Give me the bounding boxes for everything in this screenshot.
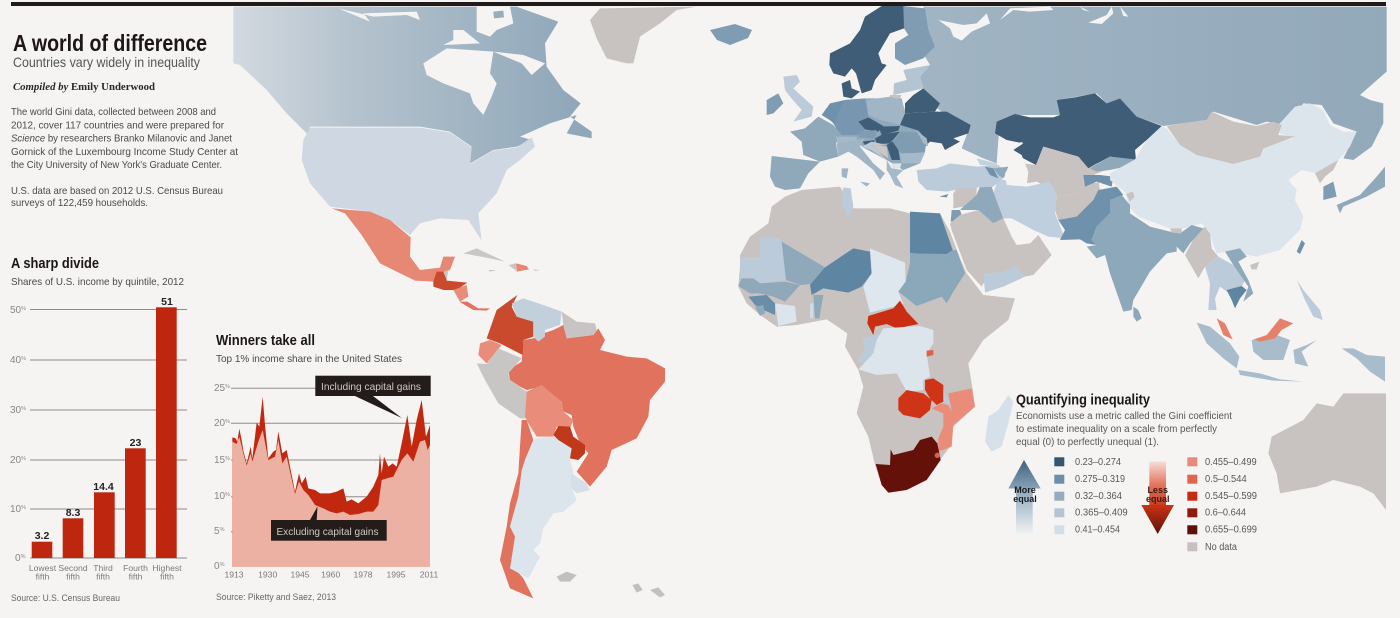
bar chart: 20	[10, 455, 21, 466]
Australia	[1268, 393, 1386, 510]
top rule	[11, 2, 1386, 6]
Ecuador	[478, 340, 502, 363]
bar chart: Second	[58, 563, 88, 573]
panel: Winners take all	[214, 332, 438, 603]
map: Europe	[767, 6, 1028, 197]
bar chart: Lowest	[29, 563, 57, 573]
byline: Compiled by Emily Underwood	[13, 82, 155, 93]
Spain and Portugal	[770, 156, 820, 190]
arrow: less equal: Less	[1147, 485, 1168, 495]
Greece	[887, 160, 903, 188]
arrow: more equal: equal	[1013, 494, 1037, 504]
Bosnia	[871, 143, 888, 158]
South Africa	[876, 437, 941, 493]
Italy	[837, 138, 885, 187]
no-data Africa	[738, 187, 1015, 492]
map: South America	[477, 295, 665, 598]
Taiwan	[1297, 240, 1305, 254]
Chad	[863, 248, 906, 313]
bar chart: 3.2	[35, 530, 49, 542]
bar chart: 40	[10, 355, 21, 366]
area chart: 1960	[321, 570, 340, 580]
Romania	[893, 132, 925, 154]
Philippines	[1297, 280, 1323, 320]
description: equal (0) to perfectly unequal (1).	[1016, 437, 1159, 448]
bar chart: 10	[10, 504, 21, 515]
bar chart: 8.3	[66, 507, 80, 519]
Slovakia	[878, 126, 900, 135]
Sri Lanka	[1133, 307, 1142, 322]
Yemen	[983, 267, 1025, 293]
body text: the City University of New York's Graduate Center.	[11, 159, 222, 171]
area chart: 20	[214, 418, 225, 429]
Greenland	[590, 7, 697, 63]
callout: including capital gains	[315, 376, 431, 418]
map: Middle East and South Asia	[950, 178, 1203, 322]
Kyrgyzstan	[1090, 157, 1135, 172]
heading: Winners take all	[216, 332, 315, 349]
Mauritania	[740, 237, 786, 283]
Kazakhstan	[995, 93, 1162, 168]
arrow: more equal	[1008, 460, 1041, 534]
bar chart: 51	[161, 296, 173, 308]
area chart: 0	[214, 561, 220, 572]
map: Africa	[738, 187, 1015, 493]
Syria	[953, 185, 977, 208]
New Guinea	[1342, 348, 1385, 382]
Colombia	[487, 295, 533, 355]
Hainan	[1250, 262, 1259, 269]
Arabian peninsula	[950, 210, 1052, 287]
Java	[1238, 370, 1303, 382]
Bolivia	[525, 385, 573, 437]
Afghanistan	[1055, 182, 1100, 222]
Chile	[500, 420, 533, 598]
France	[790, 117, 842, 162]
series: excluding capital gains	[232, 430, 430, 567]
bar chart: Fourth	[123, 563, 148, 573]
bar chart: %	[21, 554, 26, 560]
China	[1110, 103, 1357, 257]
world map	[233, 6, 1387, 598]
body text: Science by researchers Branko Milanovic and Janet	[11, 133, 232, 145]
bar chart: %	[21, 306, 26, 312]
Myanmar	[1185, 227, 1218, 278]
area chart: 25	[214, 383, 225, 394]
Madagascar	[985, 395, 1013, 452]
Sierra Leone	[755, 305, 765, 316]
Sudan	[898, 250, 965, 306]
bar chart: 30	[10, 405, 21, 416]
Mozambique	[932, 388, 975, 452]
Peru	[477, 348, 527, 418]
arrow: less equal: equal	[1146, 494, 1169, 504]
body text: The world Gini data, collected between 2008 and	[11, 106, 216, 118]
Caspian Sea	[998, 142, 1028, 187]
callout: excluding capital gains: Excluding capital gains	[276, 526, 378, 538]
bar chart: %	[21, 356, 26, 362]
South Korea	[1323, 182, 1337, 200]
legend: more equal scale: 0.32–0.364	[1075, 491, 1122, 502]
legend: more equal scale: 0.275–0.319	[1075, 474, 1125, 485]
bar chart: fifth	[160, 572, 174, 582]
legend: less equal scale: 0.545–0.599	[1205, 491, 1257, 502]
Switzerland	[836, 137, 857, 143]
Malaysia	[1217, 318, 1293, 342]
Czech Republic	[858, 117, 883, 132]
description	[1016, 411, 1232, 448]
area chart: 10	[214, 491, 225, 502]
India	[1087, 195, 1203, 312]
map: North America	[233, 7, 697, 311]
Thailand and Laos	[1205, 257, 1245, 310]
Tajikistan	[1083, 175, 1113, 187]
United States	[302, 128, 535, 241]
Arctic coast	[938, 7, 1128, 41]
body text: surveys of 122,459 households.	[11, 197, 148, 209]
Kalimantan	[1252, 335, 1290, 360]
Turkey	[917, 163, 1008, 192]
series: including capital gains	[232, 397, 430, 567]
Germany	[825, 98, 868, 135]
Iran	[993, 178, 1065, 238]
Arctic islands	[493, 11, 504, 18]
area chart: %	[225, 419, 230, 425]
Guianas	[562, 312, 597, 338]
legend: less equal scale: No data	[1205, 542, 1237, 553]
Belarus	[905, 88, 940, 113]
bar chart: 50	[10, 305, 21, 316]
legend: less equal scale: 0.5–0.544	[1205, 474, 1247, 485]
area chart: 1930	[258, 570, 277, 580]
Paraguay	[553, 426, 585, 460]
Venezuela	[512, 298, 562, 342]
Bulgaria	[900, 153, 925, 163]
subtitle: Countries vary widely in inequality	[13, 54, 200, 70]
Russia	[920, 7, 1387, 163]
Ireland	[767, 93, 783, 115]
area chart: %	[225, 384, 230, 390]
Uzbekistan and Turkmenistan	[1023, 147, 1105, 197]
source: Source: Piketty and Saez, 2013	[216, 592, 336, 603]
Azerbaijan	[993, 167, 1008, 178]
area chart	[214, 376, 438, 580]
Zambia	[898, 378, 943, 418]
Cambodia	[1227, 286, 1247, 308]
North Korea	[1315, 160, 1338, 183]
Uruguay	[570, 473, 590, 493]
body text	[11, 106, 238, 209]
legend: less equal scale: 0.455–0.499	[1205, 457, 1257, 468]
Cyprus	[939, 194, 948, 197]
area chart: 1995	[386, 570, 406, 580]
Central African Republic	[867, 301, 918, 335]
body text: U.S. data are based on 2012 U.S. Census Bureau	[11, 185, 223, 197]
area chart: 1978	[353, 570, 373, 580]
Mongolia	[1167, 112, 1295, 164]
map: Iceland	[710, 24, 752, 45]
source: Source: U.S. Census Bureau	[11, 593, 120, 604]
Guinea	[748, 295, 775, 315]
area chart: 1913	[224, 570, 244, 580]
Serbia	[887, 142, 900, 160]
legend: more equal scale	[1054, 457, 1128, 536]
Mali	[782, 242, 825, 285]
bar chart: Highest	[152, 563, 182, 573]
legend: more equal scale: 0.365–0.409	[1075, 508, 1128, 518]
DR Congo	[858, 326, 933, 392]
legend: less equal scale	[1187, 457, 1257, 553]
Argentina	[510, 437, 577, 578]
title: A world of difference	[13, 30, 207, 56]
callout: including capital gains: Including capital gains	[321, 381, 421, 393]
bar chart: fifth	[96, 572, 110, 582]
description: Economists use a metric called the Gini coefficient	[1016, 411, 1232, 422]
Georgia	[977, 158, 998, 167]
Canada and Alaska	[233, 7, 592, 163]
Caribbean	[463, 248, 540, 272]
bar chart: 23	[130, 437, 141, 449]
Ukraine	[900, 112, 971, 150]
Malawi	[943, 390, 954, 412]
Sumatra	[1197, 323, 1239, 368]
Mexico	[332, 208, 455, 282]
callout: excluding capital gains	[271, 506, 387, 541]
area chart: 15	[214, 455, 225, 466]
bar chart: Third	[93, 563, 113, 573]
Denmark	[842, 80, 860, 98]
area chart: %	[225, 492, 230, 498]
Congo	[857, 333, 882, 363]
Japan	[1337, 167, 1385, 213]
arrow: more equal: More	[1014, 485, 1036, 495]
subheading: Top 1% income share in the United States	[216, 353, 402, 365]
bar chart: %	[21, 456, 26, 462]
map: Russia and East Asia	[920, 7, 1387, 310]
United Kingdom	[783, 75, 813, 122]
legend: less equal scale: 0.655–0.699	[1205, 524, 1257, 536]
Senegal and Burkina Faso	[738, 278, 800, 302]
bar chart: fifth	[66, 572, 80, 582]
area chart: %	[225, 456, 230, 462]
Kaliningrad	[890, 95, 902, 98]
heading: A sharp divide	[11, 255, 99, 272]
heading: Quantifying inequality	[1016, 392, 1151, 408]
area chart: 1945	[290, 570, 310, 580]
area chart: 2011	[420, 570, 438, 580]
Pakistan	[1058, 187, 1123, 245]
bar chart: 14.4	[93, 481, 114, 493]
legend: more equal scale: 0.23–0.274	[1075, 457, 1121, 468]
Slovenia	[863, 140, 875, 145]
Macedonia	[892, 163, 902, 168]
panel: A sharp divide	[10, 255, 187, 604]
Falkland and southern islands	[557, 572, 665, 597]
Bhutan	[1170, 228, 1182, 233]
Hudson Bay and Arctic channels	[338, 7, 563, 115]
Togo and Benin	[813, 295, 823, 318]
Benelux	[822, 100, 845, 123]
area chart: %	[220, 562, 225, 568]
bar chart: fifth	[129, 572, 143, 582]
subheading: Shares of U.S. income by quintile, 2012	[11, 276, 184, 288]
Jordan	[951, 210, 962, 222]
Poland	[867, 97, 906, 125]
body text: Gornick of the Luxembourg Income Study Center at	[11, 146, 238, 158]
Norway and Sweden	[829, 6, 905, 93]
Kashmir	[1126, 192, 1135, 202]
Austria	[858, 130, 877, 138]
bar chart	[10, 296, 187, 582]
Iraq	[960, 187, 1003, 223]
area chart: 5	[214, 526, 220, 537]
Central America	[433, 272, 467, 290]
Baltic states	[893, 65, 930, 95]
Tunisia	[842, 187, 853, 218]
Croatia	[862, 142, 887, 160]
map: Southeast Asia and Australia	[1197, 280, 1386, 510]
body text: 2012, cover 117 countries and were prepared for	[11, 119, 224, 131]
Rwanda	[927, 350, 933, 357]
Armenia	[985, 167, 998, 178]
legend: more equal scale: 0.41–0.454	[1075, 524, 1120, 536]
panel: introduction	[11, 30, 238, 209]
bar chart: %	[21, 505, 26, 511]
panel: Quantifying inequality legend	[1008, 392, 1257, 553]
arrow: less equal	[1141, 462, 1174, 534]
Ivory Coast	[775, 303, 797, 326]
description: to estimate inequality on a scale from perfectly	[1016, 424, 1217, 435]
Hungary	[875, 132, 900, 144]
Finland	[895, 6, 935, 65]
Brazil	[508, 325, 665, 487]
Vietnam	[1225, 248, 1253, 302]
bar chart: 0	[15, 553, 21, 564]
bar chart: %	[21, 406, 26, 412]
area chart: %	[220, 527, 225, 533]
Swaziland	[935, 453, 940, 458]
Moldova	[917, 131, 928, 147]
Niger	[810, 248, 872, 295]
bar chart: fifth	[36, 572, 50, 582]
Egypt	[910, 212, 953, 254]
Sulawesi	[1293, 340, 1317, 367]
legend: less equal scale: 0.6–0.644	[1205, 508, 1246, 518]
central Europe base	[825, 98, 927, 170]
